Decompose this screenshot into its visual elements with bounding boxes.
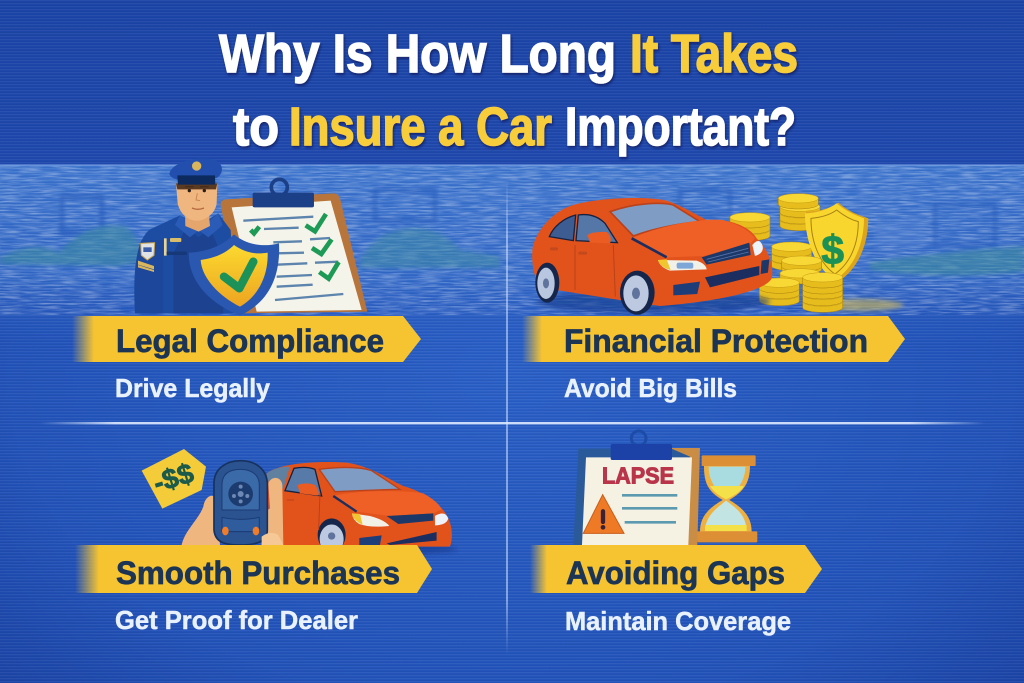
subheading: Drive Legally: [115, 373, 271, 403]
title: to: [233, 97, 279, 157]
banner: smooth purchases: [75, 545, 432, 593]
subheading: Get Proof for Dealer: [115, 605, 358, 635]
illustration: lapse clipboard and hourglass: [573, 431, 757, 545]
dividers: [40, 180, 985, 655]
subheading: Avoid Big Bills: [564, 373, 737, 403]
ghost background shapes: [0, 190, 1024, 276]
panel: legal compliance: [72, 159, 421, 403]
panel: avoiding gaps: [530, 431, 822, 636]
icon: police officer: [134, 159, 235, 313]
icon: orange car: [263, 462, 457, 556]
banner: legal compliance: [72, 316, 421, 362]
icon: lapse clipboard: LAPSE: [602, 462, 674, 488]
heading: Avoiding Gaps: [566, 555, 785, 591]
heading: Legal Compliance: [116, 323, 384, 359]
icon: coin stacks: [730, 194, 903, 311]
panel: smooth purchases: [75, 449, 457, 635]
icon: dollar shield: $: [821, 227, 844, 273]
illustration: price tag, key fob and car: [142, 449, 457, 556]
heading: Smooth Purchases: [116, 555, 400, 591]
subheading: Maintain Coverage: [565, 606, 791, 636]
icon: clipboard checklist: [221, 179, 367, 313]
title: Why Is How Long: [219, 24, 616, 84]
icon: lapse clipboard: [573, 431, 700, 545]
icon: shield with check: [189, 234, 279, 316]
title: Important?: [565, 97, 796, 157]
illustration: officer with clipboard and shield: [134, 159, 367, 316]
icon: orange car: [532, 198, 772, 315]
icon: hourglass: [697, 455, 757, 542]
illustration: car with coins and shield: [532, 194, 903, 315]
title: Insure a Car: [289, 97, 552, 157]
icon: price tag: [142, 449, 206, 509]
icon: dollar shield: [805, 203, 868, 282]
title: It Takes: [630, 24, 798, 84]
icon: hand and key fob: [182, 461, 283, 545]
panel: financial protection: [522, 194, 905, 403]
heading: Financial Protection: [564, 323, 868, 359]
icon: price tag: -$$: [149, 457, 198, 499]
banner: financial protection: [522, 316, 905, 362]
title: [219, 24, 798, 157]
icon: front coins: [759, 256, 843, 312]
banner: avoiding gaps: [530, 545, 822, 593]
